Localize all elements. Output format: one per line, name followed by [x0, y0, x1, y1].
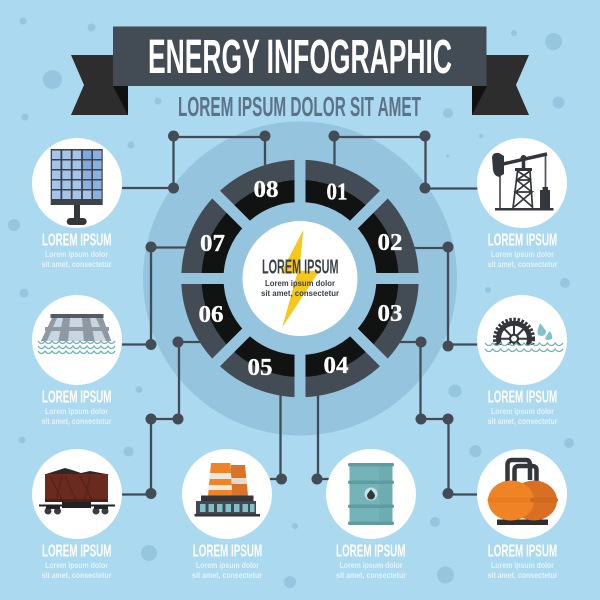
icon: power plant [194, 463, 260, 516]
caption: sit amet, consectetur [336, 570, 407, 580]
backdrop circle [143, 122, 457, 436]
caption [42, 540, 112, 580]
caption: sit amet, consectetur [42, 259, 112, 269]
icon: coal wagon [39, 468, 115, 514]
label 05: 05 [248, 355, 272, 381]
caption: sit amet, consectetur [192, 570, 263, 580]
label 02: 02 [378, 230, 402, 256]
label 07: 07 [200, 231, 225, 257]
caption: LOREM IPSUM [42, 386, 112, 406]
label 03: 03 [378, 301, 402, 327]
donut chart with eight segments [176, 155, 424, 402]
center text: sit amet, consectetur [261, 288, 340, 298]
connectors [122, 130, 478, 499]
caption [336, 540, 407, 580]
caption: LOREM IPSUM [42, 540, 112, 560]
caption [488, 540, 558, 580]
caption: Lorem ipsum dolor [491, 560, 555, 570]
caption: sit amet, consectetur [42, 416, 112, 426]
icon: barrel [348, 463, 394, 525]
ribbon banner [71, 26, 529, 115]
caption: Lorem ipsum dolor [45, 560, 109, 570]
center circle [242, 221, 358, 336]
icon: lightning bolt [281, 230, 319, 327]
panel: cooling towers [182, 449, 272, 580]
caption: sit amet, consectetur [488, 416, 558, 426]
caption [488, 386, 558, 426]
caption [192, 540, 263, 580]
caption [42, 230, 112, 269]
caption: LOREM IPSUM [42, 230, 112, 250]
panel: oil pump [477, 138, 567, 269]
caption: Lorem ipsum dolor [196, 560, 260, 570]
caption: Lorem ipsum dolor [340, 560, 403, 570]
caption: Lorem ipsum dolor [45, 249, 109, 259]
caption: sit amet, consectetur [488, 259, 558, 269]
icon: pumpjack [492, 153, 554, 210]
panel: dam [32, 295, 122, 426]
caption: Lorem ipsum dolor [45, 406, 109, 416]
caption [488, 230, 558, 269]
icon: solar panel [51, 149, 103, 225]
panel: water wheel [477, 295, 567, 426]
panel: oil barrel [326, 449, 416, 580]
caption: LOREM IPSUM [193, 540, 262, 560]
label 06: 06 [198, 302, 224, 328]
center text: Lorem ipsum dolor [265, 278, 336, 288]
label 08: 08 [254, 177, 278, 203]
caption: Lorem ipsum dolor [491, 249, 555, 259]
center text [261, 256, 340, 298]
panel: coal wagon [32, 449, 122, 580]
caption: Lorem ipsum dolor [491, 406, 555, 416]
label 01: 01 [326, 180, 348, 206]
icon: tank [488, 460, 558, 525]
panel: solar [32, 138, 122, 269]
label 04: 04 [324, 353, 348, 379]
panel: storage tank [477, 449, 567, 580]
center text: LOREM IPSUM [262, 256, 338, 278]
caption [42, 386, 112, 426]
icon: water wheel [485, 319, 563, 362]
caption: sit amet, consectetur [488, 570, 558, 580]
caption: sit amet, consectetur [42, 570, 112, 580]
caption: LOREM IPSUM [336, 540, 406, 560]
icon: hydro dam [38, 314, 115, 354]
